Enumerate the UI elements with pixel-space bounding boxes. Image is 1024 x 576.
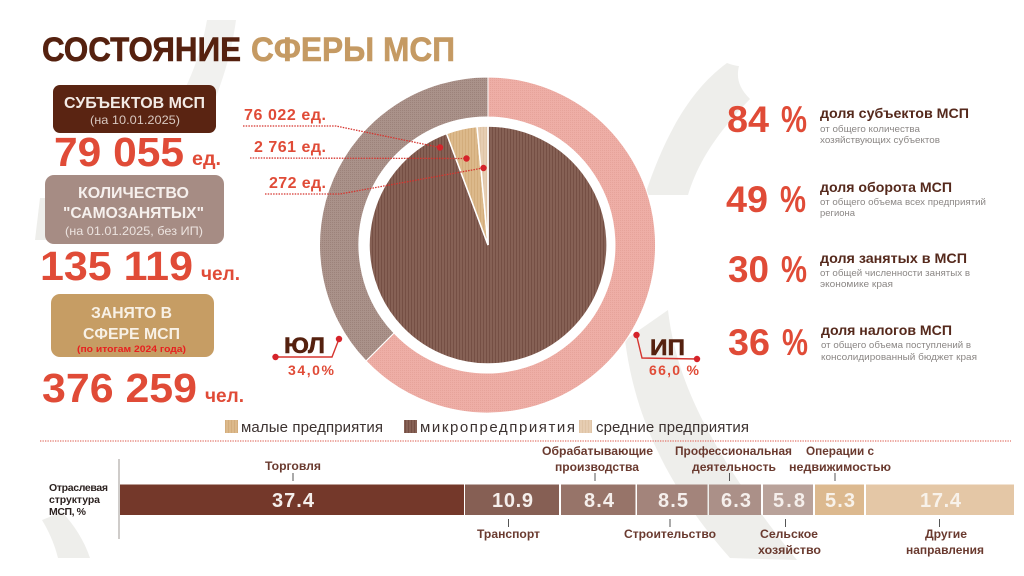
label: Профессиональная деятельность — [675, 444, 792, 481]
label: Профессиональная деятельность: Профессиональная — [675, 444, 792, 458]
bar chart heading: отраслевая структура: МСП, % — [49, 506, 87, 518]
panel: занято в сфере МСП: СФЕРЕ МСП — [83, 326, 180, 343]
chart: inner pie — [369, 126, 607, 364]
callout: ЮЛ 34,0% — [272, 333, 342, 378]
ring segment: ЮЛ 34% — [320, 77, 488, 361]
panel: количество самозанятых: "САМОЗАНЯТЫХ" — [63, 205, 204, 222]
pie slice: малые предприятия — [446, 126, 488, 245]
stat: 84 %: от общего количества — [820, 124, 921, 135]
callout: ИП 66,0 %: ИП — [650, 335, 685, 360]
number: 79 055 ед.: 79 055 — [54, 129, 184, 175]
callout: 2 761 ед.: 2 761 ед. — [254, 139, 326, 156]
label: Сельское хозяйство: хозяйство — [758, 543, 821, 557]
bar segment: Операции с недвижимостью — [815, 484, 864, 515]
bar labels — [265, 444, 984, 557]
bar chart heading: отраслевая структура: Отраслевая — [49, 482, 108, 494]
stat: 30 % — [728, 249, 970, 290]
label: Сельское хозяйство — [758, 519, 821, 557]
stat: 84 % — [727, 99, 969, 146]
stat: 30 %: 30 — [728, 249, 769, 290]
bar segment: Другие направления: 17.4 — [920, 490, 962, 512]
callout: 272 ед.: 272 ед. — [269, 175, 326, 192]
bar segment: Строительство — [637, 484, 708, 515]
label: Транспорт: Транспорт — [477, 527, 540, 541]
panel: занято в сфере МСП: (по итогам 2024 года) — [77, 344, 186, 355]
label: Профессиональная деятельность: деятельность — [692, 460, 776, 474]
stat: 36 %: % — [782, 322, 808, 363]
stat: 30 %: доля занятых в МСП — [820, 250, 967, 266]
label: Другие направления: направления — [906, 543, 984, 557]
number: 376 259 чел.: чел. — [205, 386, 244, 407]
panel: количество самозанятых — [45, 175, 224, 244]
legend — [225, 419, 749, 436]
panel: количество самозанятых: (на 01.01.2025, без ИП) — [65, 224, 203, 238]
panel: субъектов МСП: (на 10.01.2025) — [90, 113, 180, 127]
stat: 36 %: от общего объема поступлений в — [821, 340, 971, 351]
number: 79 055 ед.: ед. — [192, 149, 221, 170]
label: Другие направления: Другие — [925, 527, 967, 541]
bar segment: Торговля: 37.4 — [272, 490, 315, 512]
background watermark curves — [35, 20, 797, 560]
label: Транспорт — [477, 519, 540, 541]
bar chart heading: отраслевая структура: структура — [49, 494, 100, 506]
stat: 49 %: доля оборота МСП — [820, 179, 952, 195]
stat: 30 %: экономике края — [820, 279, 893, 290]
ring segment: ИП 66% — [366, 77, 656, 413]
legend: малые предприятия — [241, 419, 383, 436]
bar chart heading: отраслевая структура — [49, 482, 108, 518]
stat: 49 %: % — [780, 179, 806, 220]
stat: 49 % — [726, 179, 986, 220]
panel: занято в сфере МСП — [51, 294, 214, 357]
stat: 36 %: доля налогов МСП — [821, 322, 952, 338]
label: Строительство: Строительство — [624, 527, 716, 541]
bar chart: отраслевая структура — [120, 484, 1014, 515]
bar segment: Строительство: 8.5 — [658, 490, 688, 512]
bar segment: Другие направления — [866, 484, 1014, 515]
title: СФЕРЫ МСП — [251, 31, 455, 69]
label: Строительство — [624, 519, 716, 541]
bar segment: Сельское хозяйство — [763, 484, 813, 515]
stat: 49 %: 49 — [726, 179, 768, 220]
title: СОСТОЯНИЕ — [42, 31, 241, 69]
stat: 30 %: % — [781, 249, 807, 290]
stat: 36 % — [728, 322, 977, 363]
panel: количество самозанятых: КОЛИЧЕСТВО — [78, 185, 189, 202]
bar segment: Сельское хозяйство: 5.8 — [773, 490, 805, 512]
panel: субъектов МСП: СУБЪЕКТОВ МСП — [64, 95, 205, 112]
label: Обрабатывающие производства: производства — [555, 460, 639, 474]
callout: ЮЛ 34,0%: ЮЛ — [284, 333, 325, 358]
stat: 84 %: хозяйствующих субъектов — [820, 135, 940, 146]
bar segment: Торговля — [120, 484, 464, 515]
bar segment: Профессиональная деятельность: 6.3 — [721, 490, 751, 512]
bar segment: Транспорт — [465, 484, 559, 515]
bar segment: Обрабатывающие производства — [561, 484, 636, 515]
label: Обрабатывающие производства: Обрабатывающие — [542, 444, 653, 458]
stat: 36 %: 36 — [728, 322, 770, 363]
bar segment: Обрабатывающие производства: 8.4 — [584, 490, 615, 512]
stat: 84 %: % — [781, 99, 807, 140]
panel: субъектов МСП — [53, 85, 216, 133]
stat: 49 %: региона — [820, 208, 856, 219]
label: Другие направления — [906, 519, 984, 557]
label: Операции с недвижимостью: Операции с — [806, 444, 874, 458]
callout: ЮЛ 34,0%: 34,0% — [288, 362, 335, 378]
callout: 272 ед. — [265, 165, 487, 194]
label: Торговля: Торговля — [265, 459, 321, 473]
label: Обрабатывающие производства — [542, 444, 653, 481]
callout: ИП 66,0 %: 66,0 % — [649, 362, 700, 378]
stat: 84 %: 84 — [727, 99, 769, 140]
label: Операции с недвижимостью: недвижимостью — [789, 460, 891, 474]
bar segment: Профессиональная деятельность — [709, 484, 761, 515]
label: Сельское хозяйство: Сельское — [760, 527, 818, 541]
label: Торговля — [265, 459, 321, 481]
stat: 36 %: консолидированный бюджет края — [821, 352, 977, 363]
bar segment: Операции с недвижимостью: 5.3 — [825, 490, 855, 512]
callout: 2 761 ед. — [250, 139, 470, 162]
callout: ИП 66,0 % — [633, 332, 700, 378]
chart: outer ring ИП / ЮЛ — [320, 77, 656, 413]
stat: 49 %: от общего объема всех предприятий — [820, 197, 986, 208]
bar segment: Транспорт: 10.9 — [492, 490, 533, 512]
stat: 84 %: доля субъектов МСП — [820, 105, 969, 121]
label: Операции с недвижимостью — [789, 444, 891, 481]
legend: средние предприятия — [596, 419, 749, 436]
callout: 76 022 ед.: 76 022 ед. — [244, 107, 326, 124]
number: 376 259 чел.: 376 259 — [42, 365, 197, 411]
legend: микропредприятия — [420, 419, 575, 436]
callout: 76 022 ед. — [243, 107, 443, 151]
panel: занято в сфере МСП: ЗАНЯТО В — [91, 305, 172, 322]
pie slice: микропредприятия — [369, 126, 607, 364]
stat: 30 %: от общей численности занятых в — [820, 268, 970, 279]
title — [42, 31, 455, 69]
pie slice: средние предприятия — [477, 126, 488, 245]
number: 135 119 чел.: 135 119 — [40, 243, 193, 289]
number: 135 119 чел.: чел. — [201, 264, 240, 285]
